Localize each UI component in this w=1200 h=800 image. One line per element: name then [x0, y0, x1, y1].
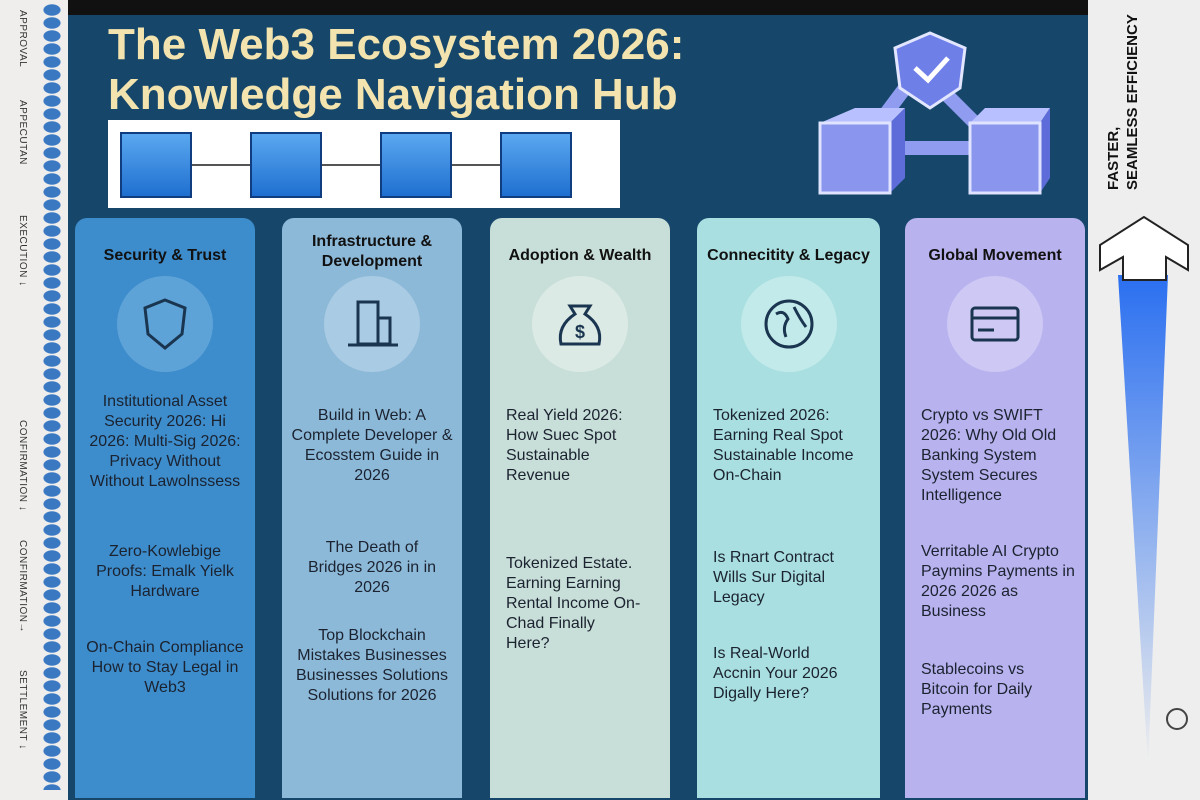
panel: connectivity & legacy: Is Real-World Accnin Your 2026 Digally Here? — [713, 645, 838, 702]
right strip: speed arrow — [1088, 0, 1200, 800]
top black bar — [68, 0, 1088, 15]
panel: security & trust: Zero-Kowlebige Proofs: Emalk Yielk Hardware — [96, 543, 234, 600]
panel: adoption & wealth: Tokenized Estate. Earning Earning Rental Income On-Chad Finally Here? — [506, 555, 640, 652]
icon: clock — [1166, 708, 1188, 730]
icon: building — [324, 276, 420, 372]
dot column — [42, 4, 62, 790]
panel: security & trust — [75, 218, 255, 798]
left process strip: SETTLEMENT ↓ — [17, 670, 28, 750]
panel: connectivity & legacy: Is Rnart Contract Wills Sur Digital Legacy — [713, 549, 834, 606]
icon: money bag — [532, 276, 628, 372]
panel: infrastructure — [282, 218, 462, 798]
panel: infrastructure: The Death of Bridges 2026 in in 2026 — [308, 539, 436, 596]
panel: security & trust: Security & Trust — [104, 247, 226, 264]
panel: global movement: Verritable AI Crypto Paymins Payments in 2026 2026 as Business — [921, 543, 1075, 620]
icon: network cubes with shield — [818, 31, 1050, 194]
caption: SEAMLESS EFFICIENCY — [1124, 14, 1141, 190]
panel: security & trust: On-Chain Compliance How to Stay Legal in Web3 — [86, 639, 244, 696]
panel: adoption & wealth: Adoption & Wealth — [509, 247, 651, 264]
arrow — [1099, 216, 1189, 744]
icon: card — [947, 276, 1043, 372]
left process strip: CONFIRMATION→ — [17, 540, 28, 633]
title: Knowledge Navigation Hub — [108, 70, 678, 119]
left process strip: CONFIRMATION ↓ — [17, 420, 28, 511]
panel: connectivity & legacy: Connecitity & Legacy — [707, 247, 870, 264]
panel: global movement: Stablecoins vs Bitcoin for Daily Payments — [921, 661, 1032, 718]
left process strip — [0, 0, 68, 800]
title: The Web3 Ecosystem 2026: — [108, 20, 684, 69]
stage labels: APPROVAL — [17, 10, 28, 67]
caption — [1105, 14, 1141, 190]
panel: connectivity & legacy — [697, 218, 880, 798]
icon: shield — [117, 276, 213, 372]
panel: connectivity & legacy: Tokenized 2026: Earning Real Spot Sustainable Income On-Chain — [713, 407, 854, 484]
panel: global movement: Global Movement — [928, 247, 1062, 264]
panel: adoption & wealth: Real Yield 2026: How Suec Spot Sustainable Revenue — [506, 407, 623, 484]
left process strip: APPECUTAN — [17, 100, 28, 165]
panel: global movement — [905, 218, 1085, 798]
panel: global movement: Crypto vs SWIFT 2026: Why Old Old Banking System System Secures Intelligence — [921, 407, 1056, 504]
panel: infrastructure: Build in Web: A Complete Developer & Ecosstem Guide in 2026 — [292, 407, 452, 484]
left process strip: EXECUTION ↓ — [17, 215, 28, 287]
icon: globe — [740, 276, 836, 372]
panel: adoption & wealth — [490, 218, 670, 798]
title — [108, 20, 684, 119]
caption: FASTER, — [1105, 127, 1122, 190]
panel: security & trust: Institutional Asset Security 2026: Hi 2026: Multi-Sig 2026: Privacy Without Without Lawolnssess — [89, 393, 241, 490]
panel: infrastructure: Top Blockchain Mistakes Businesses Businesses Solutions Solutions for 2026 — [296, 627, 448, 704]
panel: infrastructure: Infrastructure & Development — [312, 233, 432, 270]
icon: money bag: $ — [575, 322, 585, 342]
blockchain cubes strip — [108, 120, 620, 208]
